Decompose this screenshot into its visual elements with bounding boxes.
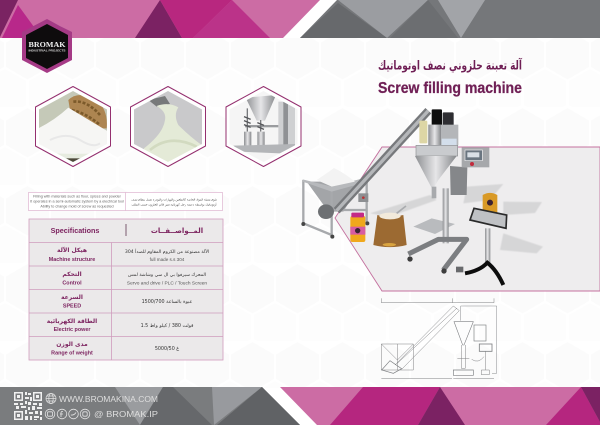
row: machine structure: full made s.s 304 [150,257,185,262]
table header: Specifications [51,226,99,235]
icons: social media [45,409,90,419]
description: English: It operates in a semi-automatic system by a electrical tool [30,200,124,204]
icon: globe [46,394,56,404]
description: Arabic: أوتوماتيك بواسطة دعسة رجل كهربائية تغير قالم الحلزون حسب الطلب [132,202,217,206]
row: speed: السرعة [61,294,83,301]
top banner: gray triangles [300,0,600,38]
table header [51,226,203,235]
weighing scale [456,193,507,285]
row: machine structure: Machine structure [49,257,95,263]
row: range of weight [51,341,179,356]
row: machine structure: الآلة مصنوعة من الكروم المقاوم للصدأ 304 [125,248,209,255]
row: electric power: فولت 380 / كيلو واط 1.5 [141,323,193,329]
description: English: Ability to change mold of screw as requested [40,204,114,208]
row: electric power [47,318,193,333]
auger feed tube [337,111,428,211]
row: electric power: Electric power [54,327,91,333]
product jar [350,213,365,242]
QR code [14,392,42,420]
technical dimension drawing [381,298,497,379]
filter sleeve [419,121,427,143]
row: control: Servo and drive / PLC / Touch Screen [127,280,207,286]
row: control: المحرك سيرفوا بي ال سي وشاشة لمس [128,273,206,278]
top banner: pink triangles [0,0,320,38]
specifications table [29,219,223,360]
row: electric power: الطاقة الكهربائية [47,318,97,325]
photo hexagon: auger filler parts [226,86,302,166]
logo wordmark: BROMAK [28,40,66,49]
row: speed: عبوة بالساعة 1500/700 [142,299,193,305]
row: range of weight: غ 5000/50 [155,346,179,352]
logo tagline: INDUSTRIAL PROJECTS [28,50,66,52]
filler head [415,109,458,198]
description box [28,192,222,210]
row: control: Control [62,280,82,286]
floor shadows [370,184,543,253]
photo hexagon: flour and biscuits [36,86,110,166]
product sack [373,206,407,247]
machine backdrop panel [335,147,600,291]
row: speed [61,294,193,310]
row: range of weight: Range of weight [51,350,93,356]
footer: pink band [280,387,600,425]
control panel [462,147,489,167]
description: Arabic: تقوم بتعبئة المواد الخاصة كالطحين والبهارات والبودرة تعمل بنظام نصف [131,198,217,202]
website url: WWW.BROMAKINA.COM [59,395,158,404]
row: machine structure [49,246,209,263]
table header: المــواصــفــات [151,227,203,235]
description: English: Filling with materials such as flour, spices and powder [33,194,122,198]
row: control [62,271,207,286]
footer: gray band [0,387,300,425]
social handle: @ BROMAK.IP [94,410,159,419]
logo: Bromak hexagon [22,19,72,73]
row: speed: SPEED [63,304,81,310]
row: machine structure: هيكل الآلة [57,246,87,254]
row: control: التحكم [62,271,82,278]
loading hopper [301,168,369,239]
filler stand [407,166,467,274]
title: Arabic: آلة تعبنة حلزوني نصف اوتوماتيك [378,58,523,72]
photo hexagon: powder pouring [130,86,206,166]
machine photo [301,109,543,285]
row: range of weight: مدى الوزن [56,341,88,348]
title: English: Screw filling machine [378,80,522,97]
